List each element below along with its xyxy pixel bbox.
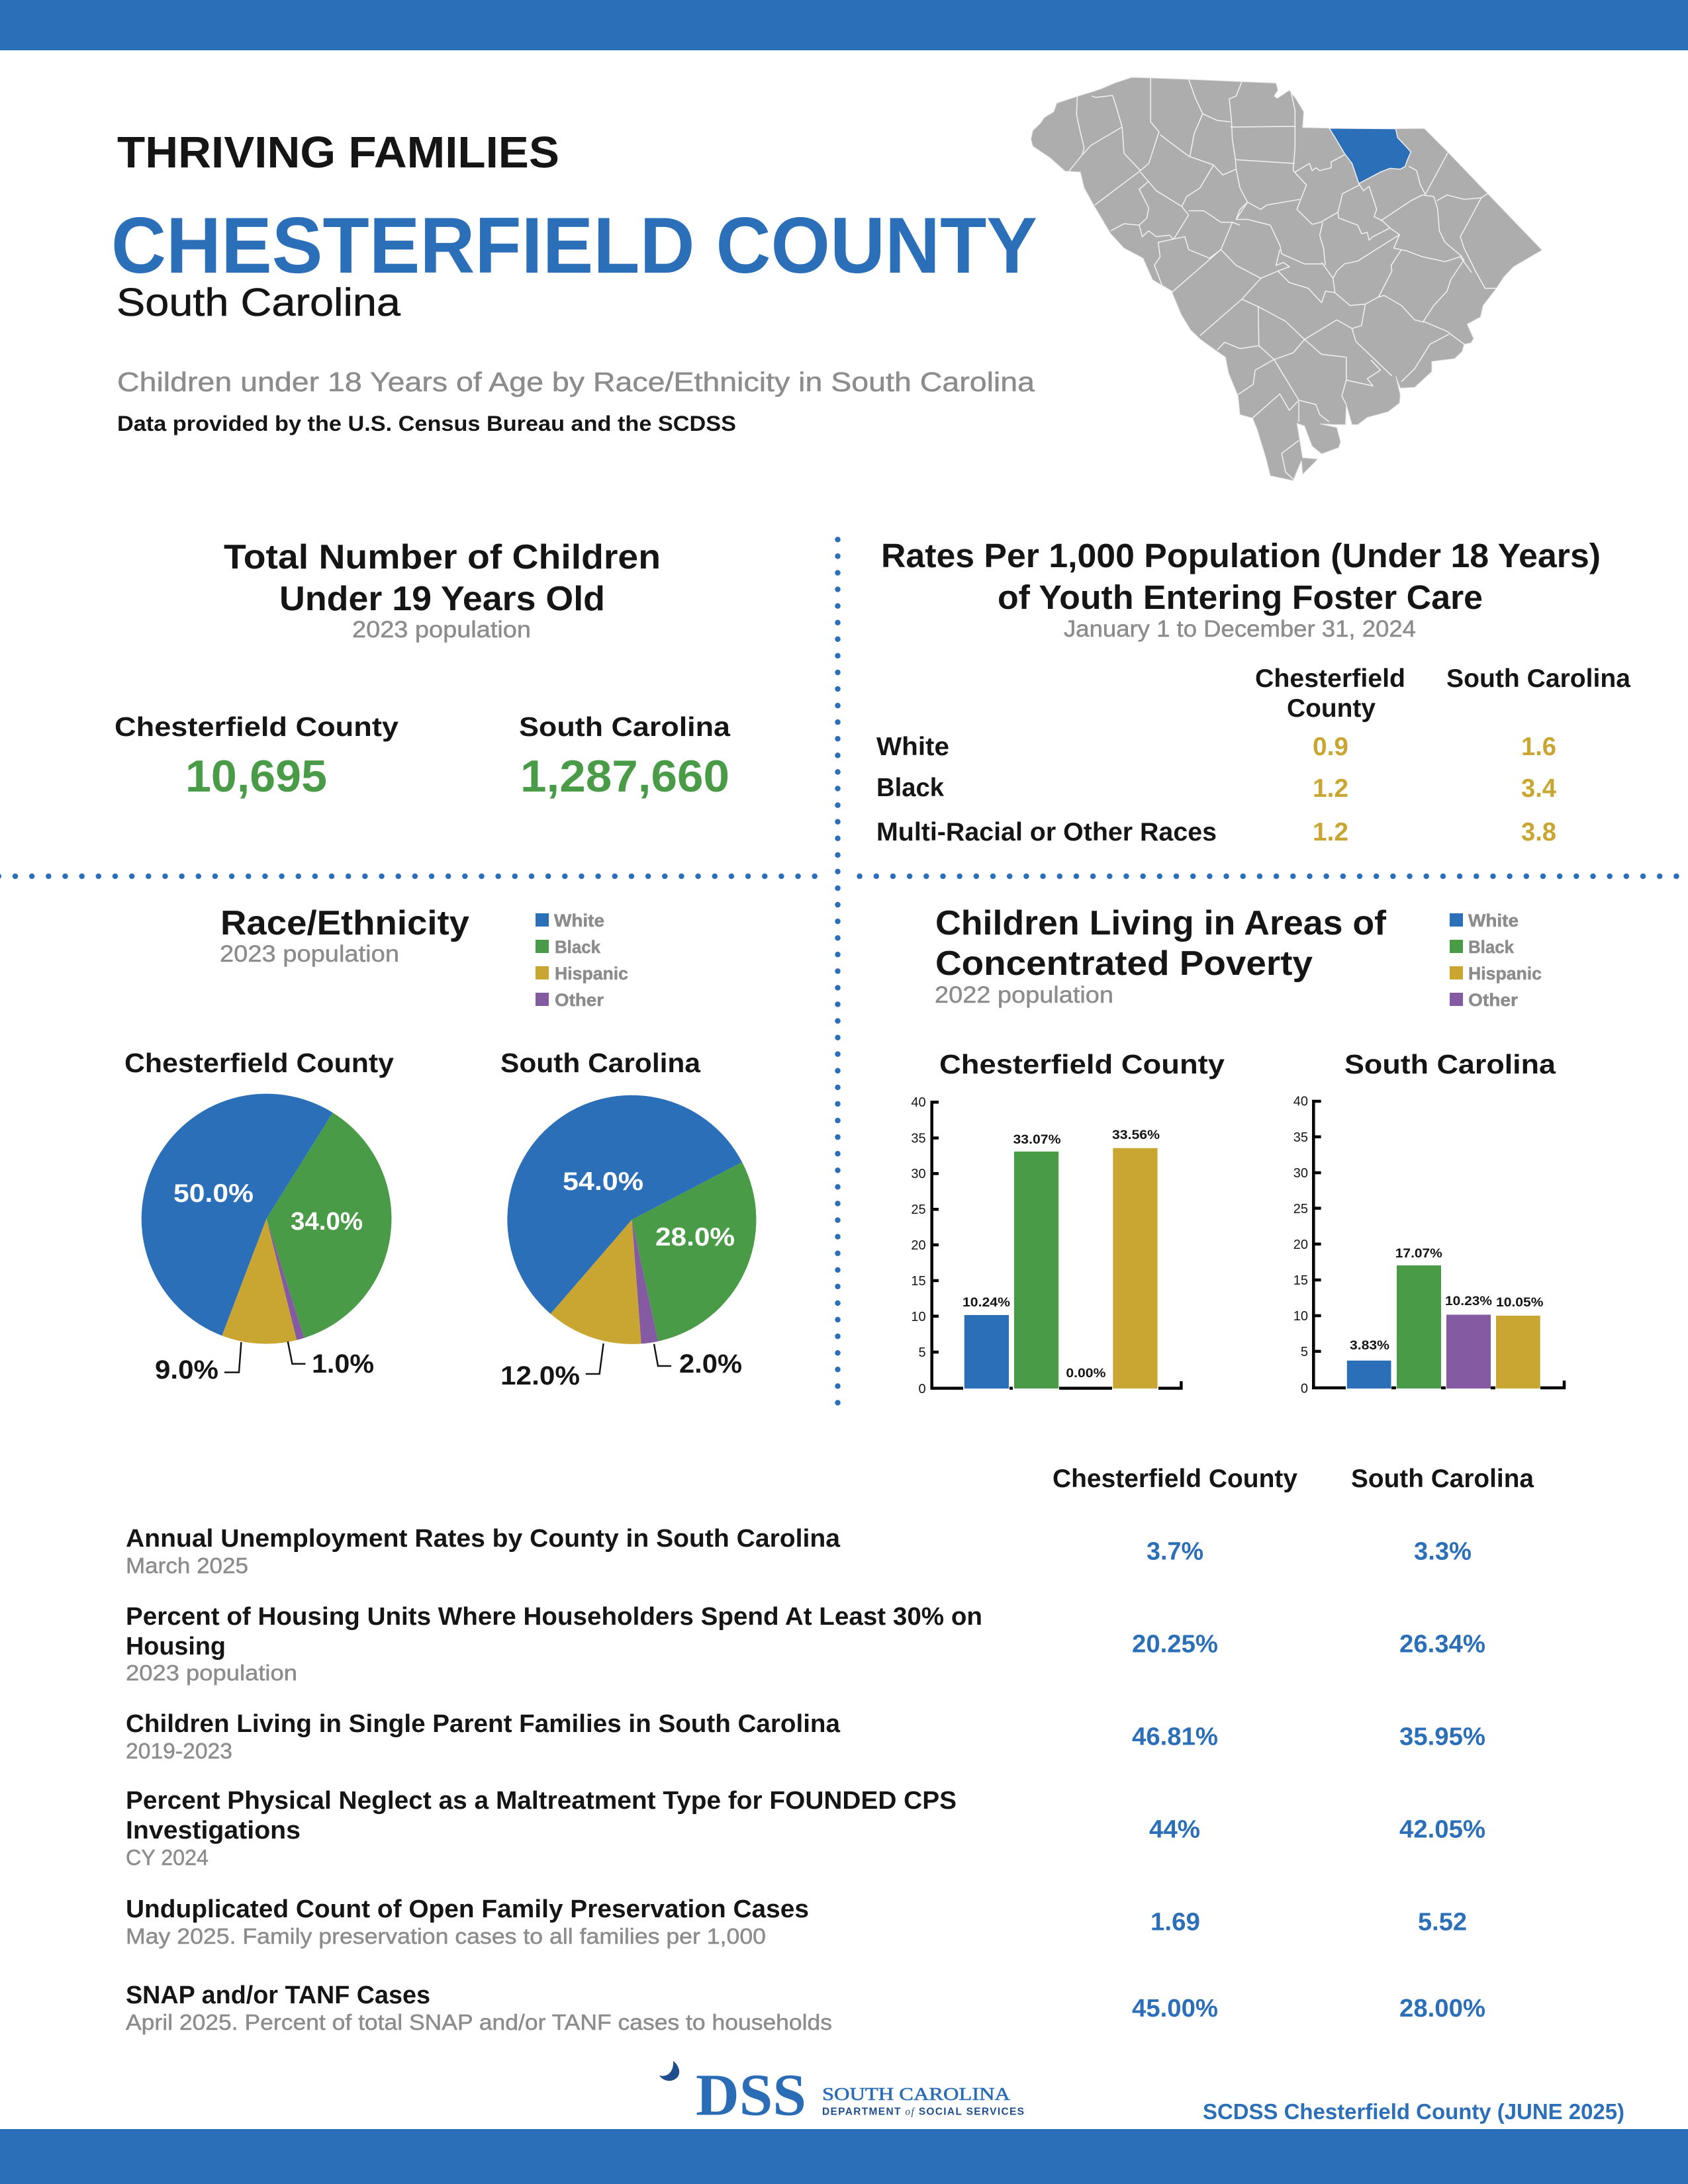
bar chart: state: 35 [1293, 1130, 1308, 1145]
DSS logo [659, 2061, 1024, 2128]
bar chart: state: 10.05% [1496, 1296, 1544, 1310]
bar chart: state [1293, 1095, 1564, 1396]
pie chart: county: 9.0% [155, 1355, 218, 1385]
row: single parent families: 46.81% [1132, 1723, 1218, 1751]
pie chart: state: 28.0% [655, 1223, 735, 1251]
pie chart: county: 50.0% [173, 1179, 254, 1208]
dotted dividers [835, 539, 841, 1406]
bar chart: county: 10.24% [962, 1296, 1010, 1310]
row: white: 1.6 [1521, 733, 1556, 761]
row: white [876, 733, 1556, 761]
pie chart: county: 1.0% [312, 1349, 374, 1379]
row: family preservation: 5.52 [1418, 1909, 1467, 1936]
row: unemployment: 3.7% [1147, 1538, 1203, 1566]
panel: concentrated poverty [911, 904, 1564, 1396]
header text block [111, 128, 1037, 435]
title: Thriving Families: THRIVING FAMILIES [117, 128, 559, 177]
pie chart: state: 54.0% [563, 1167, 643, 1196]
pie title: county: Chesterfield County [124, 1048, 394, 1078]
legend: White [554, 911, 604, 931]
bar chart: state: 20 [1293, 1238, 1308, 1252]
row: black: Black [876, 774, 944, 802]
row: SNAP/TANF: SNAP and/or TANF Cases [126, 1981, 430, 2009]
row: physical neglect: CY 2024 [126, 1845, 209, 1870]
column header: county: Chesterfield [1255, 664, 1405, 693]
highlighted county: Chesterfield [1329, 128, 1411, 183]
bar chart: county: 25 [911, 1203, 926, 1217]
top banner [0, 0, 1688, 50]
bar chart: county: 35 [911, 1132, 926, 1146]
row: housing: Housing [126, 1633, 226, 1661]
heading line 2: Under 19 Years Old [279, 580, 605, 618]
row: single parent families: Children Living in Single Parent Families in South Carolina [126, 1710, 841, 1738]
legend: Black [555, 937, 601, 957]
legend [536, 911, 628, 1010]
description: Children under 18 Years of Age by Race/Ethnicity in South Carolina [117, 367, 1035, 397]
legend: Hispanic [1468, 964, 1542, 983]
footer credit: SCDSS Chesterfield County (JUNE 2025) [1203, 2099, 1624, 2124]
row: single parent families: 2019-2023 [126, 1739, 232, 1763]
row: physical neglect: 44% [1149, 1816, 1200, 1844]
legend: Black [1468, 937, 1515, 957]
column header: state: South Carolina [1446, 664, 1630, 693]
title: Chesterfield County: CHESTERFIELD COUNTY [111, 201, 1037, 290]
row: multi-racial [876, 818, 1556, 846]
sub-heading: 2023 population [220, 941, 399, 967]
pie chart: county: 34.0% [291, 1208, 363, 1236]
row: single parent families: 35.95% [1399, 1723, 1485, 1751]
row: black: 3.4 [1521, 774, 1556, 803]
bar chart: county: 30 [911, 1167, 926, 1181]
panel: indicators table [126, 1465, 1534, 2034]
row: unemployment: Annual Unemployment Rates by County in South Carolina [126, 1525, 841, 1553]
icon: crescent moon [659, 2061, 679, 2081]
bar chart: state: 10 [1293, 1309, 1308, 1324]
pie chart: state: 2.0% [679, 1349, 742, 1379]
row: black [876, 774, 1556, 803]
bar chart: county: 0 [918, 1382, 926, 1396]
row: physical neglect: Percent Physical Neglect as a Maltreatment Type for FOUNDED CPS [126, 1787, 957, 1815]
bar chart: state: 25 [1293, 1202, 1308, 1216]
bar chart: county: 15 [911, 1274, 926, 1289]
row: housing: 26.34% [1399, 1631, 1485, 1659]
pie title: state: South Carolina [500, 1048, 701, 1078]
row: unemployment: March 2025 [126, 1553, 248, 1578]
row: family preservation: 1.69 [1150, 1909, 1200, 1936]
row: physical neglect: Investigations [126, 1817, 301, 1844]
state value: 1,287,660 [520, 751, 729, 801]
bar chart: county: 5 [918, 1345, 926, 1360]
bar chart: state: 15 [1293, 1273, 1308, 1288]
heading: Race/Ethnicity [220, 904, 469, 942]
row: family preservation [126, 1895, 1467, 1948]
bar chart: state: 5 [1301, 1345, 1308, 1359]
row: white: White [876, 733, 949, 761]
map of South Carolina counties [1031, 77, 1542, 480]
logo letters: DSS [696, 2062, 806, 2128]
data source note: Data provided by the U.S. Census Bureau and the SCDSS [117, 412, 736, 435]
legend: Hispanic [555, 964, 628, 983]
panel: total number of children [115, 538, 731, 801]
bar chart: state: 30 [1293, 1166, 1308, 1181]
row: multi-racial: Multi-Racial or Other Races [876, 818, 1217, 846]
row: family preservation: Unduplicated Count of Open Family Preservation Cases [126, 1895, 809, 1923]
sub-heading: 2023 population [352, 617, 531, 643]
bottom banner [0, 2129, 1688, 2184]
row: SNAP/TANF: 28.00% [1399, 1995, 1485, 2023]
bar chart: county: 40 [911, 1095, 926, 1110]
heading line 2: Concentrated Poverty [935, 944, 1313, 983]
bar chart: county: 0.00% [1066, 1367, 1106, 1381]
row: unemployment: 3.3% [1414, 1538, 1472, 1566]
panel: race/ethnicity [124, 904, 756, 1390]
row: housing: 2023 population [126, 1661, 297, 1685]
row: SNAP/TANF: April 2025. Percent of total SNAP and/or TANF cases to households [126, 2010, 832, 2034]
column header: county line 2: County [1287, 694, 1376, 723]
county label: Chesterfield County [115, 711, 399, 742]
row: white: 0.9 [1313, 733, 1348, 761]
row: housing: 20.25% [1132, 1631, 1218, 1659]
pie chart: state: 12.0% [500, 1361, 580, 1390]
bar chart: county: 33.07% [1013, 1133, 1061, 1147]
bar chart title: state: South Carolina [1344, 1049, 1556, 1079]
sub-heading: January 1 to December 31, 2024 [1064, 616, 1416, 642]
pie chart: county [142, 1094, 391, 1385]
row: unemployment [126, 1525, 1472, 1578]
logo line: South Carolina: SOUTH CAROLINA [822, 2084, 1011, 2104]
row: black: 1.2 [1313, 774, 1348, 803]
heading: Children Living in Areas of [935, 904, 1387, 942]
legend: Other [555, 990, 604, 1010]
bar chart: state: 0 [1301, 1382, 1308, 1396]
column header: state: South Carolina [1351, 1465, 1534, 1493]
bar chart: state: 10.23% [1445, 1295, 1492, 1308]
pie chart: state [500, 1095, 756, 1390]
row: SNAP/TANF: 45.00% [1132, 1995, 1218, 2023]
bar chart: state: 40 [1293, 1095, 1308, 1109]
subtitle: South Carolina: South Carolina [117, 281, 400, 324]
bar chart: county [911, 1095, 1181, 1396]
heading: Rates Per 1,000 Population (Under 18 Years) [881, 537, 1601, 574]
legend: Other [1468, 990, 1519, 1010]
row: physical neglect [126, 1787, 1485, 1870]
panel: foster care rates [876, 537, 1630, 846]
bar chart title: county: Chesterfield County [939, 1049, 1225, 1079]
sub-heading: 2022 population [935, 982, 1113, 1008]
bar chart: state: 3.83% [1350, 1339, 1389, 1353]
row: multi-racial: 1.2 [1313, 818, 1348, 846]
bar chart: county: 10 [911, 1310, 926, 1324]
legend [1450, 911, 1542, 1010]
row: physical neglect: 42.05% [1399, 1816, 1485, 1844]
county value: 10,695 [185, 751, 327, 801]
row: housing: Percent of Housing Units Where Householders Spend At Least 30% on [126, 1603, 982, 1631]
bar chart: county: 20 [911, 1238, 926, 1253]
column header: county: Chesterfield County [1053, 1465, 1297, 1493]
logo line: Department of Social Services: DEPARTMENT of SOCIAL SERVICES [822, 2106, 1024, 2118]
heading: Total Number of Children [224, 538, 661, 576]
bar chart: state: 17.07% [1395, 1247, 1442, 1261]
row: multi-racial: 3.8 [1521, 818, 1556, 846]
heading line 2: of Youth Entering Foster Care [998, 578, 1483, 616]
state label: South Carolina [519, 711, 731, 742]
row: SNAP/TANF [126, 1981, 1485, 2034]
row: family preservation: May 2025. Family preservation cases to all families per 1,000 [126, 1924, 766, 1948]
bar chart: county: 33.56% [1112, 1128, 1160, 1142]
row: single parent families [126, 1710, 1485, 1763]
row: housing [126, 1603, 1485, 1685]
legend: White [1468, 911, 1519, 931]
